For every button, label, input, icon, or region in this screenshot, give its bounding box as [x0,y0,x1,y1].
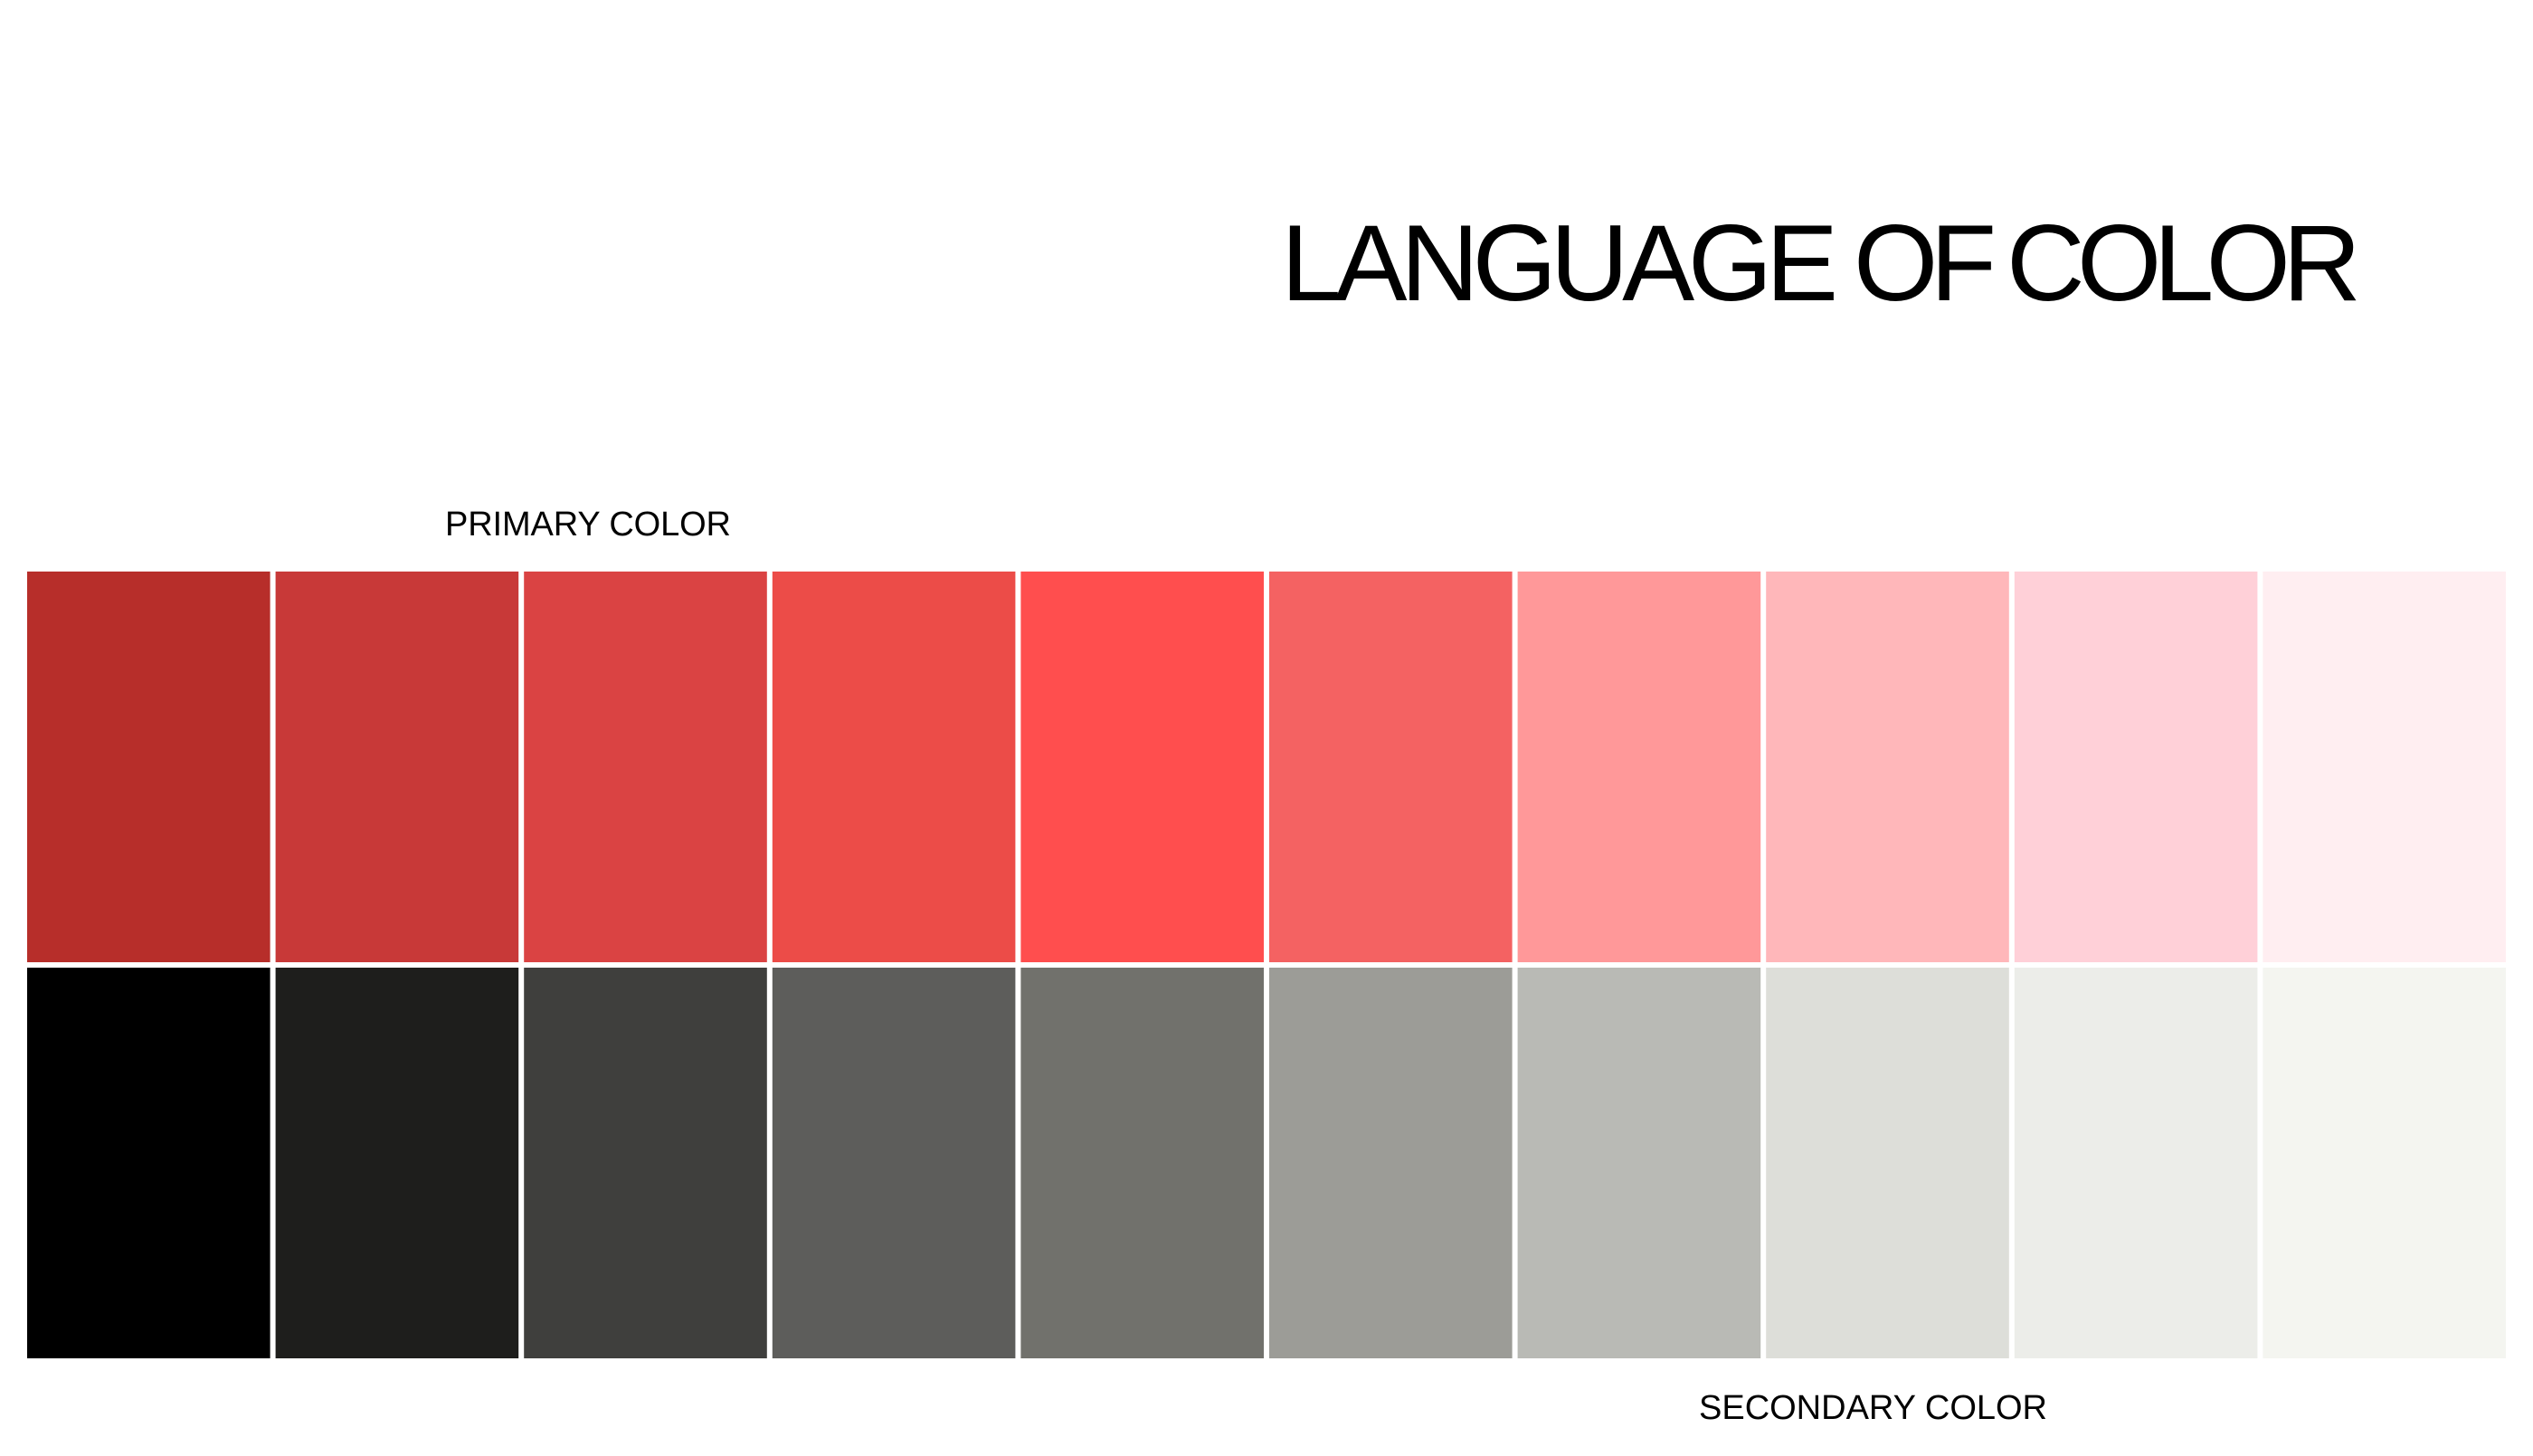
swatch: red 6 [1269,572,1513,962]
title: LANGUAGE [1281,203,1838,324]
swatch: gray 10 [2263,968,2506,1358]
swatch: red 9 [2015,572,2257,962]
swatch: gray 8 [1766,968,2009,1358]
swatch: gray 5 [1020,968,1264,1358]
swatch: gray 9 [2015,968,2257,1358]
panel: primary color swatches [27,572,2506,962]
swatch: red 4 [773,572,1015,962]
heading: primary color: PRIMARY COLOR [445,506,731,544]
swatch: red 7 [1518,572,1760,962]
swatch: red 3 [524,572,767,962]
title: OF [1854,203,1997,324]
title: COLOR [2006,203,2361,324]
swatch: gray 1 [27,968,270,1358]
swatch: red 2 [276,572,518,962]
swatch: gray 7 [1518,968,1760,1358]
swatch: gray 3 [524,968,767,1358]
panel: secondary color swatches [27,968,2506,1358]
swatch: red 5 [1020,572,1264,962]
swatch: gray 6 [1269,968,1513,1358]
swatch: gray 2 [276,968,518,1358]
swatch: red 1 [27,572,270,962]
heading: secondary color: SECONDARY COLOR [1699,1389,2047,1427]
swatch: red 8 [1766,572,2009,962]
swatch: red 10 [2263,572,2506,962]
title [1281,203,2361,324]
swatch: gray 4 [773,968,1015,1358]
